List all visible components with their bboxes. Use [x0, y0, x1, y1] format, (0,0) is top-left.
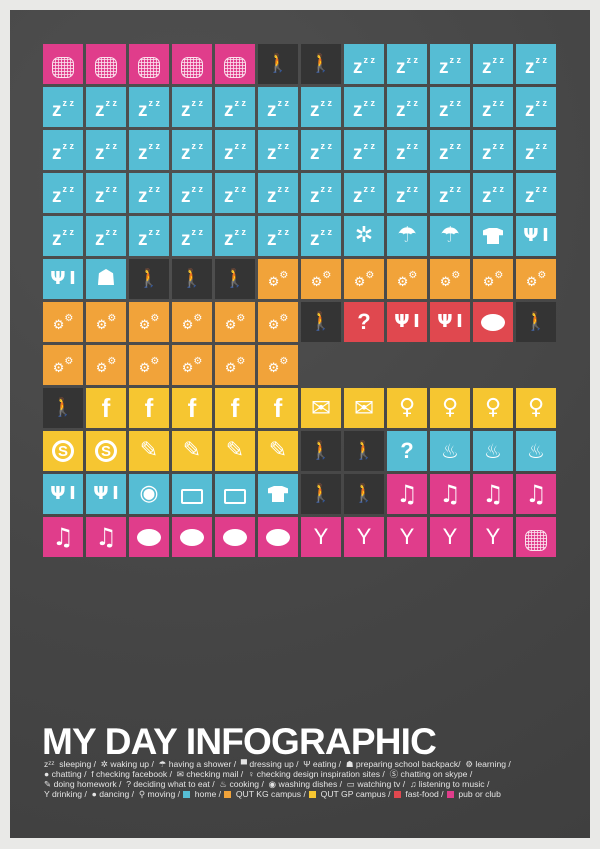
grid row 4	[43, 173, 556, 213]
grid row 11	[43, 474, 556, 514]
grid row 9	[43, 388, 556, 428]
grid row 7	[43, 302, 556, 342]
grid row 2	[43, 87, 556, 127]
legend: ✎ doing homework / ? deciding what to eat / ♨ cooking / ◉ washing dishes / ▭ watching tv / ♫ listening to music /	[44, 779, 489, 789]
grid row 3	[43, 130, 556, 170]
grid row 1	[43, 44, 556, 84]
grid row 10	[43, 431, 556, 471]
legend: ● chatting / f checking facebook / ✉ checking mail / ♀ checking design inspiration sites / Ⓢ chatting on skype /	[44, 769, 472, 779]
legend: Y drinking / ● dancing / ⚲ moving / home / QUT KG campus / QUT GP campus / fast-food / pub or club	[44, 789, 501, 799]
legend	[44, 759, 511, 799]
grid row 6	[43, 259, 556, 299]
grid row 8	[43, 345, 298, 385]
grid row 5	[43, 216, 556, 256]
title: MY DAY INFOGRAPHIC	[42, 721, 436, 762]
grid row 12	[43, 517, 556, 557]
icon grid: hours of the day	[43, 44, 556, 557]
legend: zᶻᶻ sleeping / ✲ waking up / ☂ having a shower / ▀ dressing up / Ψ eating / ☗ preparing school backpack/ ⚙ learning /	[44, 759, 511, 769]
